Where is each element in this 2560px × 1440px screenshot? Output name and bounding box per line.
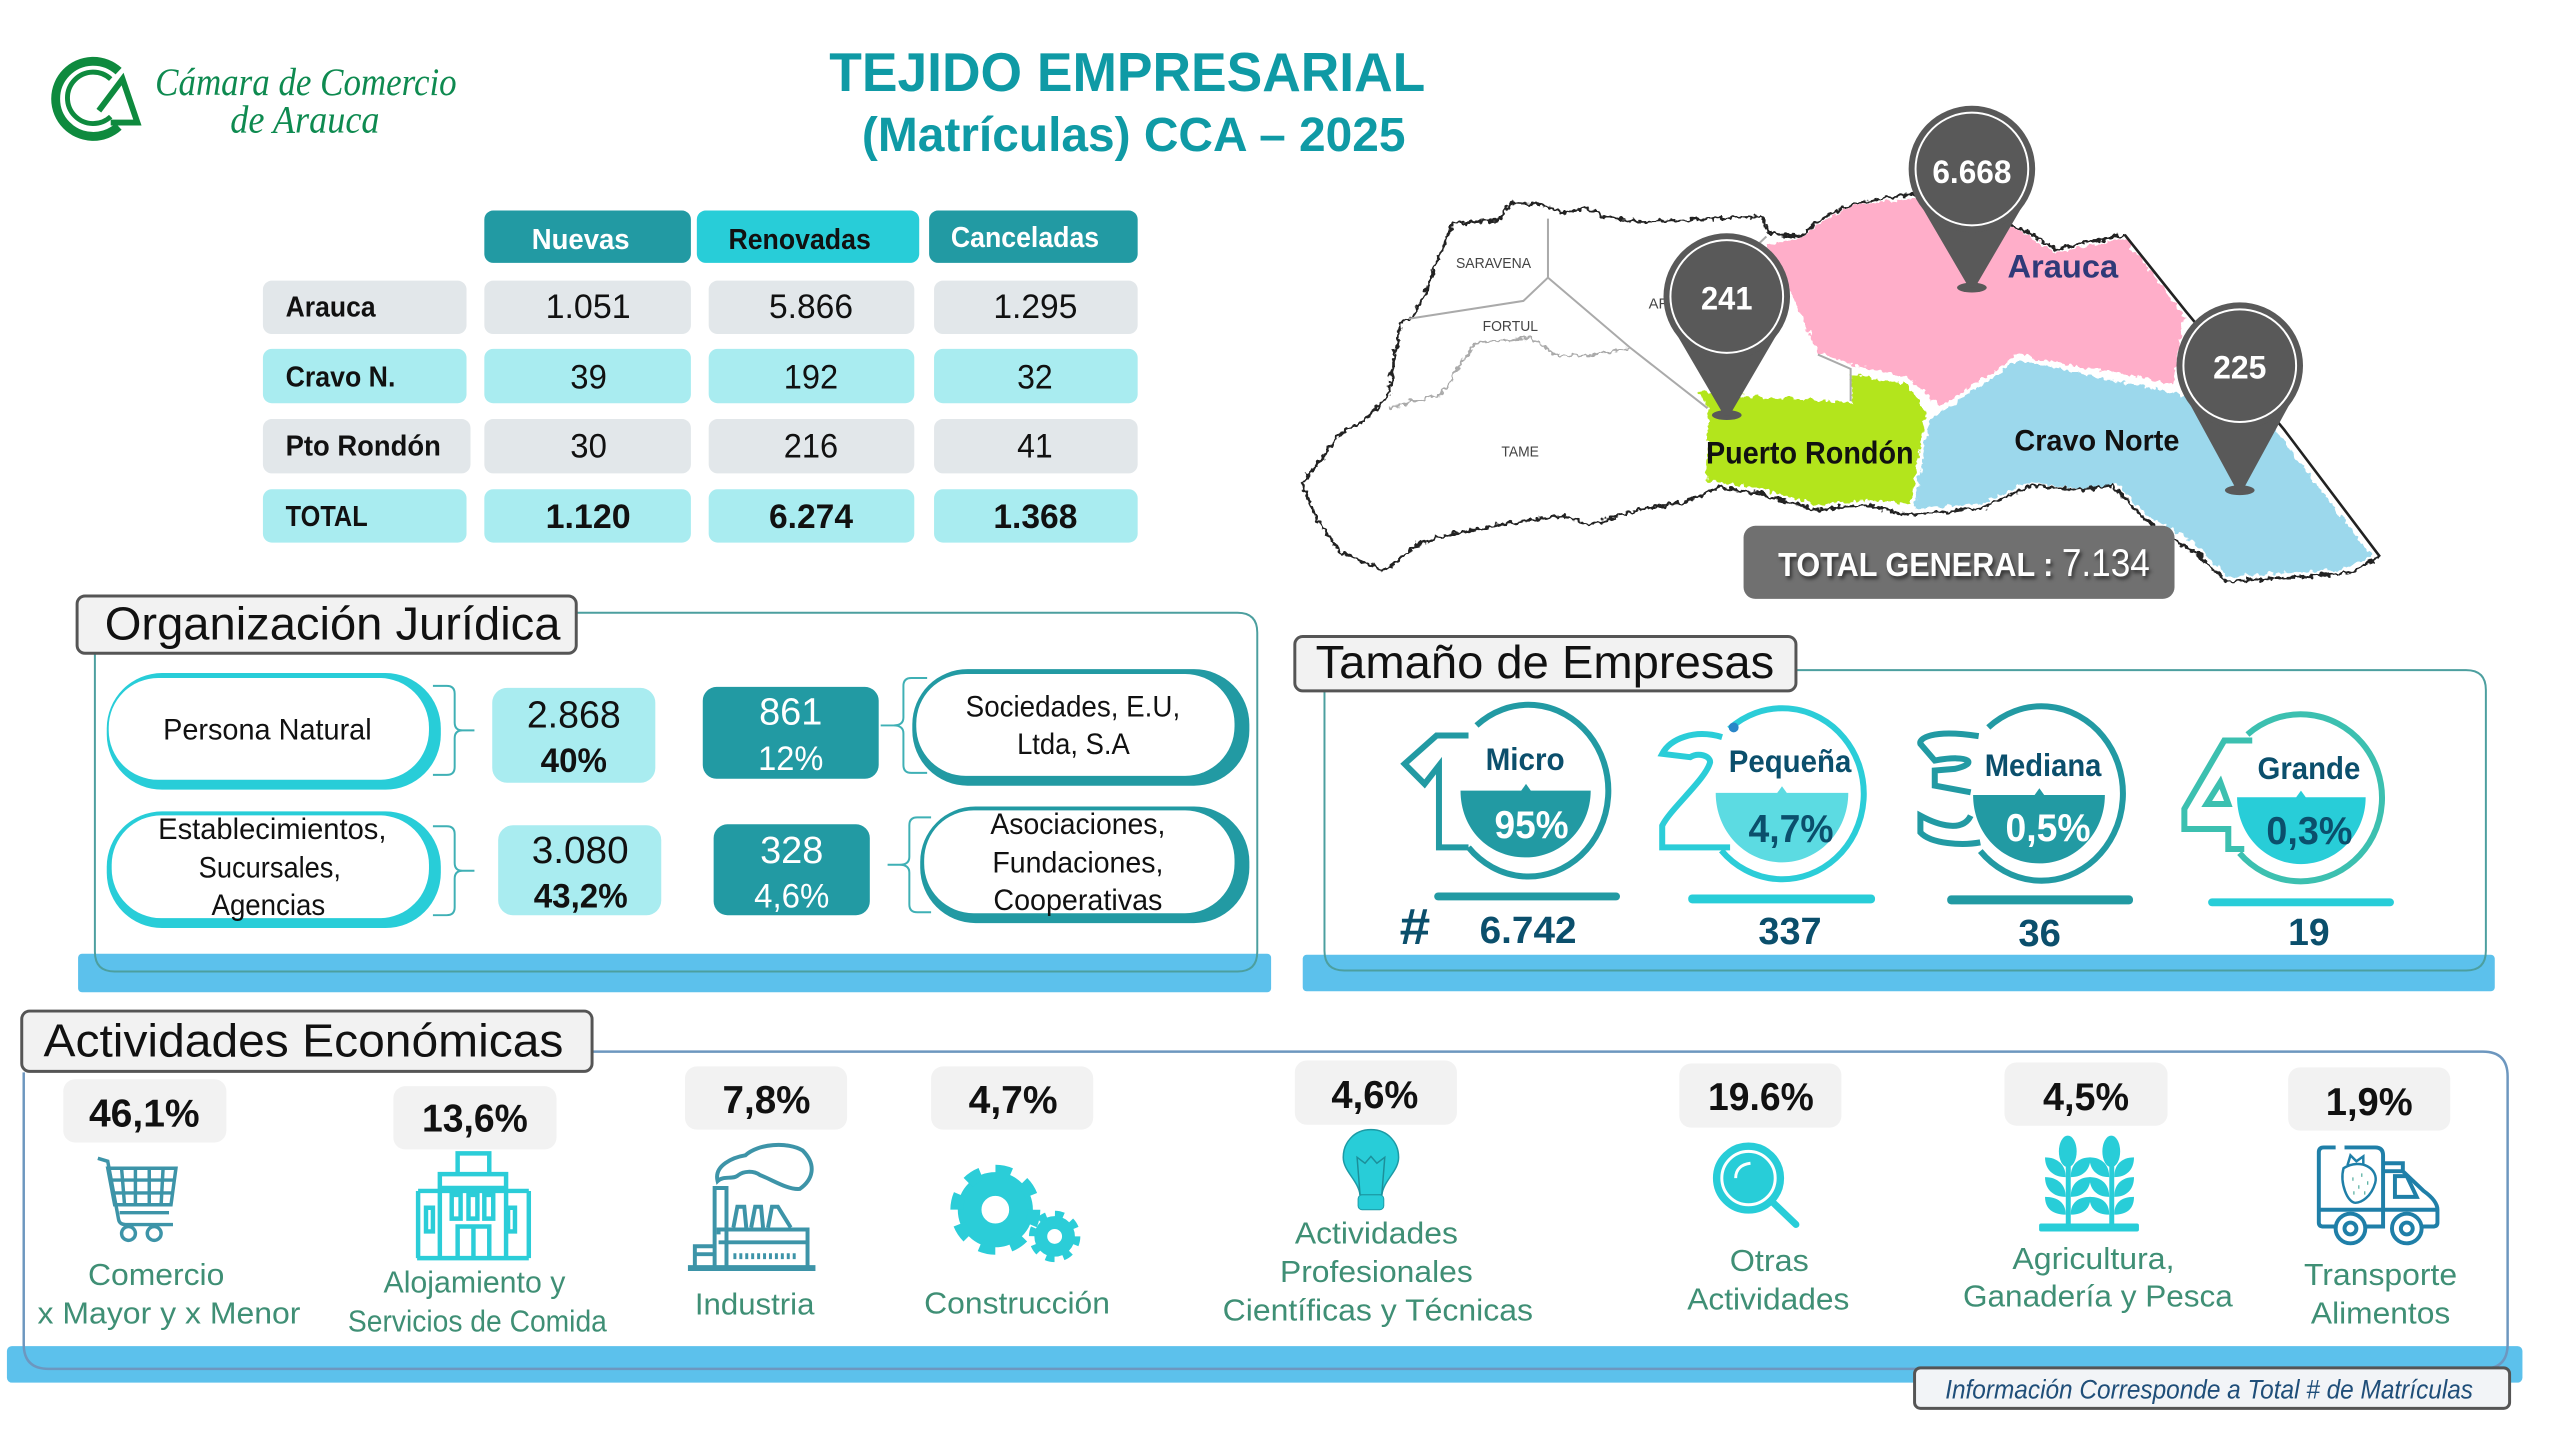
table header: Nuevas: Nuevas (532, 224, 630, 256)
pill: Establecimientos, Sucursales, Agencias: Sucursales, (199, 852, 341, 885)
municipality labels: TAME (1501, 445, 1539, 461)
pill: Establecimientos, Sucursales, Agencias: Establecimientos, (158, 813, 386, 846)
gauge: Mediana 0,5%: Mediana (1985, 747, 2102, 783)
table header: Renovadas: Renovadas (728, 224, 871, 256)
value: 3.080 43,2%: 3.080 (532, 829, 629, 871)
row: TOTAL (263, 489, 1138, 543)
panel: Tamaño de Empresas (1295, 636, 2495, 991)
map straight east edge and internal limits (1409, 219, 2380, 557)
icon: hotel building (417, 1153, 529, 1258)
value: 328 4,6%: 4,6% (754, 877, 829, 915)
gauge: Micro 95%: 95% (1494, 804, 1569, 847)
table header: Canceladas: Canceladas (951, 222, 1099, 254)
footnote: Información Corresponde a Total # de Matrículas (1945, 1374, 2473, 1404)
icon: food truck (2318, 1147, 2437, 1243)
activity: Transporte Alimentos: 1,9% (2326, 1081, 2413, 1124)
row: TOTAL: 1.368 (993, 498, 1077, 536)
row: Arauca (263, 281, 1138, 334)
pill: Persona Natural: Persona Natural (163, 713, 372, 746)
activity: Otras Actividades: 19.6% (1708, 1076, 1814, 1119)
row: Arauca: 1.051 (546, 288, 631, 326)
pin: Arauca 6.668 (1909, 106, 2035, 293)
gauge: Micro 95%: Micro (1486, 741, 1565, 777)
activity: Comercio: x Mayor y x Menor (38, 1296, 300, 1330)
icon: gears (957, 1171, 1076, 1258)
activity: Alojamiento: Servicios de Comida (348, 1304, 608, 1338)
panel: Actividades Económicas (7, 1011, 2522, 1383)
activity: Agricultura: Agricultura, (2012, 1242, 2175, 1276)
icon: factory (688, 1145, 815, 1268)
value: 3.080 43,2%: 43,2% (534, 877, 628, 915)
row: Cravo N.: Cravo N. (286, 361, 395, 393)
gauge: Micro 95% (1400, 705, 1620, 955)
heading: Actividades Económicas: Actividades Económicas (43, 1015, 563, 1067)
pill: Persona Natural (107, 673, 474, 790)
activity: Comercio: 46,1% (89, 1093, 200, 1136)
pin: Cravo Norte 225 (2176, 302, 2303, 495)
logo text (155, 60, 457, 141)
gauge: Micro 95%: # (1400, 897, 1430, 955)
row: Arauca: 5.866 (769, 288, 853, 326)
gauge: Grande 0,3%: 0,3% (2266, 810, 2352, 853)
value: 2.868 40%: 2.868 (527, 693, 621, 735)
pill: Asociaciones, Fundaciones, Cooperativas (888, 806, 1249, 923)
activity: Transporte Alimentos: Transporte (2304, 1258, 2457, 1292)
gauge: Micro 95%: 6.742 (1480, 909, 1577, 951)
municipality labels: FORTUL (1483, 319, 1538, 335)
gauge: Pequeña 4,7%: Pequeña (1729, 743, 1852, 779)
activity: Actividades Profesionales: Científicas y Técnicas (1223, 1293, 1533, 1327)
activity: Industria: 7,8% (723, 1079, 811, 1122)
value: 3.080 43,2% (498, 825, 661, 915)
row: TOTAL: 1.120 (546, 498, 631, 536)
activity: Construcción: Construcción (924, 1286, 1110, 1320)
value: 861 12%: 861 (759, 690, 822, 732)
activity: Alojamiento: Alojamiento y (384, 1266, 566, 1300)
gauge: Mediana 0,5% (1920, 706, 2133, 954)
activity: Agricultura: 4,5% (2043, 1076, 2129, 1119)
activity: Transporte Alimentos (2288, 1067, 2457, 1330)
logo icon (56, 61, 137, 136)
pill: Sociedades, E.U, Ltda, S.A (881, 669, 1249, 786)
pill: Asociaciones, Fundaciones, Cooperativas: Cooperativas (993, 884, 1162, 917)
activity: Construcción (924, 1066, 1110, 1320)
map regions and outlines (1303, 194, 2380, 582)
row: TOTAL: 6.274 (769, 498, 854, 536)
row: Pto Rondón (263, 419, 1138, 473)
footnote (1915, 1368, 2510, 1408)
activity: Alojamiento: 13,6% (422, 1098, 528, 1141)
activity: Alojamiento (348, 1086, 608, 1338)
municipality labels: Cravo Norte (2014, 425, 2179, 458)
activity: Otras Actividades: Actividades (1687, 1283, 1849, 1317)
row: Arauca: 1.295 (993, 288, 1077, 326)
row: Arauca: Arauca (286, 291, 377, 323)
row: Pto Rondón: 30 (570, 428, 607, 466)
activity: Actividades Profesionales: Profesionales (1280, 1255, 1473, 1289)
title (829, 42, 1425, 162)
gauge: Mediana 0,5%: 0,5% (2005, 807, 2091, 850)
pill: Asociaciones, Fundaciones, Cooperativas: Fundaciones, (992, 847, 1163, 880)
value: 328 4,6%: 328 (760, 829, 823, 871)
municipality labels: Puerto Rondón (1706, 435, 1914, 471)
row: Pto Rondón: 216 (784, 428, 838, 466)
activity: Comercio (38, 1079, 300, 1330)
icon: shopping cart (98, 1158, 176, 1240)
logo: Cámara de Comercio de Arauca (56, 60, 457, 141)
row: Pto Rondón: Pto Rondón (286, 431, 441, 463)
pill: Asociaciones, Fundaciones, Cooperativas: Asociaciones, (990, 808, 1165, 841)
logo text: Cámara de Comercio (155, 60, 457, 104)
pin: Cravo Norte 225: 225 (2213, 349, 2266, 386)
value: 861 12%: 12% (758, 740, 823, 778)
gauge: Pequeña 4,7%: 4,7% (1749, 808, 1834, 851)
table header: Nuevas (484, 211, 691, 263)
gauge: Pequeña 4,7% (1662, 708, 1875, 952)
panel: Organización Jurídica (77, 596, 1271, 992)
activity: Construcción: 4,7% (969, 1079, 1058, 1122)
activity: Transporte Alimentos: Alimentos (2311, 1296, 2450, 1330)
activity: Otras Actividades (1679, 1063, 1849, 1317)
row: TOTAL: TOTAL (286, 501, 368, 533)
pill: Establecimientos, Sucursales, Agencias: Agencias (212, 889, 325, 922)
value: 861 12% (703, 687, 879, 779)
gauge: Pequeña 4,7%: 337 (1758, 910, 1822, 952)
table header: Canceladas (929, 211, 1138, 263)
activity: Industria: Industria (695, 1287, 815, 1321)
municipality labels: AR (1649, 296, 1670, 312)
pill: Sociedades, E.U, Ltda, S.A: Ltda, S.A (1017, 728, 1130, 761)
logo text: de Arauca (230, 97, 380, 141)
municipality labels: Arauca (2007, 248, 2119, 285)
value: 2.868 40%: 40% (541, 742, 607, 780)
total general badge (1744, 526, 2175, 599)
row: Cravo N.: 32 (1017, 358, 1053, 396)
municipality labels (1456, 248, 2179, 471)
activity: Comercio: Comercio (88, 1258, 224, 1292)
activity: Agricultura: Ganadería y Pesca (1963, 1280, 2234, 1314)
value: 2.868 40% (492, 688, 655, 783)
activity: Actividades Profesionales: Actividades (1295, 1216, 1458, 1250)
municipality labels: SARAVENA (1456, 256, 1531, 272)
table header: Renovadas (697, 211, 919, 263)
row: Pto Rondón: 41 (1017, 428, 1053, 466)
heading: Organización Jurídica: Organización Jurídica (105, 597, 561, 649)
icon: light bulb (1343, 1130, 1399, 1210)
pin: Puerto Rondón 241 (1664, 233, 1790, 420)
activity: Industria (685, 1066, 847, 1321)
gauge: Grande 0,3%: 19 (2288, 911, 2330, 953)
pin: Arauca 6.668: 6.668 (1932, 153, 2011, 190)
map of Arauca department (1303, 106, 2380, 599)
pin: Puerto Rondón 241: 241 (1701, 279, 1752, 316)
row: Cravo N. (263, 349, 1138, 403)
heading: Tamaño de Empresas: Tamaño de Empresas (1316, 636, 1774, 688)
activity: Otras Actividades: Otras (1730, 1244, 1809, 1278)
row: Cravo N.: 39 (570, 358, 607, 396)
title: TEJIDO EMPRESARIAL (829, 42, 1425, 103)
value: 328 4,6% (714, 824, 870, 915)
activity: Actividades Profesionales (1223, 1060, 1533, 1327)
gauge: Grande 0,3% (2184, 714, 2394, 953)
pill: Sociedades, E.U, Ltda, S.A: Sociedades, E.U, (966, 691, 1180, 724)
pill: Establecimientos, Sucursales, Agencias (107, 811, 474, 928)
row: Cravo N.: 192 (784, 358, 838, 396)
table: matrículas por municipio (263, 211, 1138, 543)
gauge: Grande 0,3%: Grande (2258, 750, 2360, 786)
activity: Actividades Profesionales: 4,6% (1331, 1074, 1418, 1117)
gauge: Mediana 0,5%: 36 (2018, 912, 2061, 954)
icon: magnifying glass (1716, 1145, 1796, 1225)
activity: Agricultura (1963, 1062, 2234, 1314)
icon: wheat (2039, 1136, 2139, 1231)
title: (Matrículas) CCA – 2025 (862, 108, 1406, 162)
total general badge: TOTAL GENERAL : 7.134 (1778, 542, 2150, 585)
